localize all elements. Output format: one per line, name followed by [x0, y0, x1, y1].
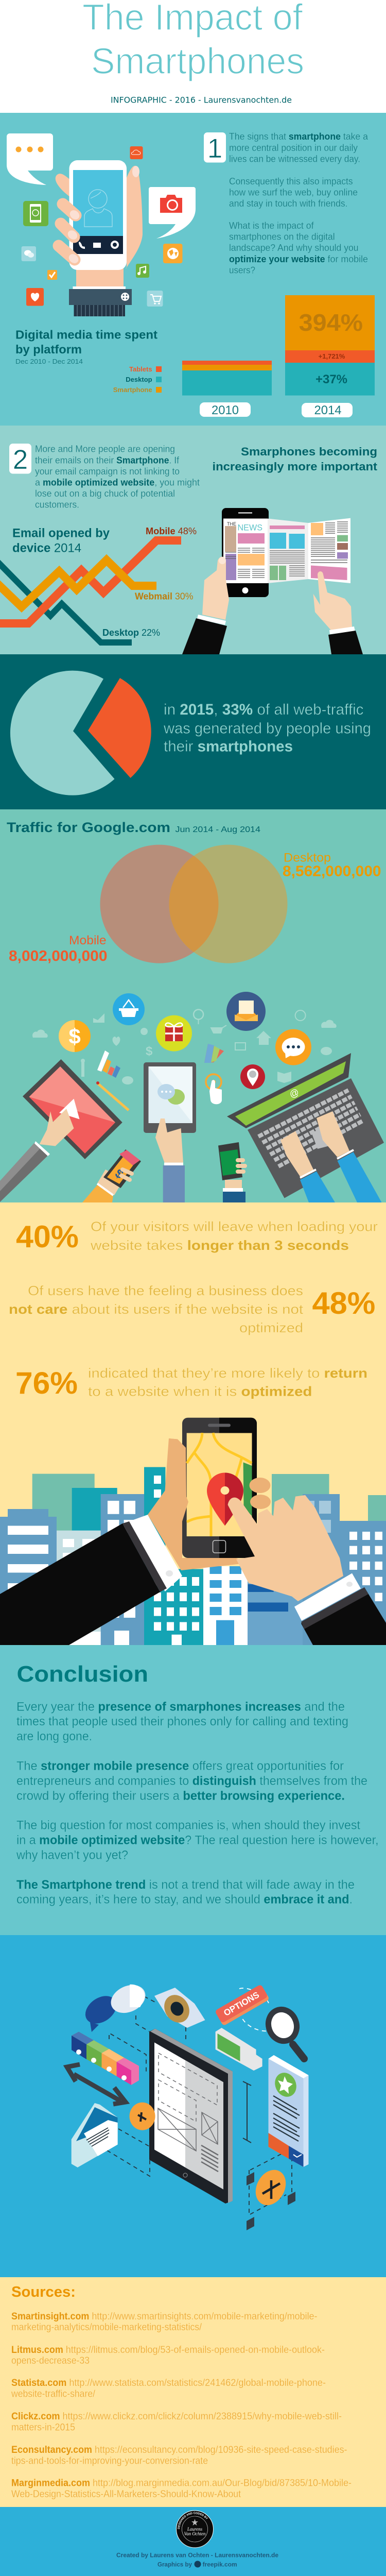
shirt cuff and sleeve: [69, 286, 132, 316]
venn label mobile: [9, 934, 107, 964]
sources list: opens-decrease-33: [11, 2355, 90, 2366]
footer badge: DESIGNED AND CODED BY: [178, 2512, 208, 2529]
phone with dollar and hand: $: [113, 1166, 126, 1182]
section 2 email text: your email campaign is not linking to: [35, 466, 180, 477]
stacked bar 2014: [285, 295, 375, 417]
section 1 intro text: users?: [229, 265, 255, 276]
stat 40%: [16, 1219, 378, 1254]
heading: email opened by device: Email opened by: [12, 526, 110, 540]
fold-out newspaper: NEWS: [238, 522, 262, 533]
chart heading: digital media time: [15, 328, 157, 365]
left thumb and fingers: [165, 1438, 271, 1525]
footer badge: Laurens: [187, 2527, 203, 2532]
dashed connector lines: [107, 1988, 292, 2215]
hand front fingers: [59, 166, 139, 265]
heading: email opened by device: [12, 526, 110, 555]
venn label mobile: Mobile: [69, 934, 107, 947]
section 1 intro text: how we surf the web, buy online: [229, 188, 358, 198]
conclusion body text: entrepreneurs and companies to distinguish themselves from the: [16, 1774, 367, 1788]
web traffic statement: in 2015, 33% of all web-traffic: [164, 701, 363, 718]
stat 48%: Of users have the feeling a business does: [28, 1283, 303, 1298]
right sleeve and cuff: [294, 1573, 386, 1645]
venn diagram: mobile vs desktop: [100, 845, 287, 963]
icon: globe: [163, 244, 182, 263]
venn label desktop: 8,562,000,000: [283, 863, 381, 880]
icon: chat bubble: [275, 1029, 311, 1065]
line chart: email opened by device: Desktop 22%: [102, 628, 160, 638]
section 1 intro text: The signs that smartphone take a: [229, 131, 369, 142]
sources list: matters-in-2015: [11, 2422, 75, 2433]
sources list: Marginmedia.com http://blog.marginmedia.com.au/Our-Blog/bid/87385/10-Mobile-: [11, 2478, 352, 2489]
illustration: city skyline: [0, 1467, 386, 1646]
stat 76%: [15, 1365, 367, 1400]
sources list: Econsultancy.com https://econsultancy.com/blog/10936-site-speed-case-studies-: [11, 2445, 347, 2455]
stat 48%: [9, 1283, 375, 1335]
icon: colour swatch: [204, 1044, 224, 1063]
phone with dollar and hand: [82, 1149, 141, 1202]
conclusion body text: in a mobile optimized website? The real question here is however,: [16, 1834, 379, 1848]
heading: smartphones more important: increasingly more important: [212, 460, 378, 473]
illustration: hand holding smartphone with app icons: [7, 133, 196, 316]
icon: music: [136, 264, 149, 278]
stacked bar 2010: 2010: [212, 403, 239, 417]
map pin: [207, 1472, 243, 1526]
conclusion body text: crowd by offering their users a better browsing experience.: [16, 1789, 345, 1803]
double arrow: [67, 2064, 126, 2104]
heading: smartphones more important: [212, 445, 378, 473]
phone: [222, 508, 269, 597]
stat 48%: not care about its users if the website is not: [9, 1301, 304, 1317]
section 1 intro text: and stay in touch with friends.: [229, 198, 348, 209]
section 2 email text: a mobile optimized website, you might: [35, 477, 200, 487]
conclusion body text: The big question for most companies is, when should they invest: [16, 1819, 360, 1832]
chart legend: [113, 365, 162, 394]
section 1 intro text: more central position in our daily: [229, 143, 358, 153]
conclusion body text: The stronger mobile presence offers great opportunities for: [16, 1759, 344, 1773]
left hand and sleeve: [182, 556, 229, 654]
section 1 intro text: Consequently this also impacts: [229, 176, 353, 187]
stat 48%: optimized: [239, 1320, 303, 1335]
section 2 email text: [35, 444, 200, 510]
option button: [215, 1984, 270, 2026]
chart heading: digital media time: by platform: [15, 343, 82, 356]
faded background icons: $: [146, 1044, 153, 1058]
stacked bar 2014: +1,721%: [319, 352, 345, 360]
stat 40%: 40%: [16, 1219, 79, 1254]
section 2 email text: customers.: [35, 500, 79, 510]
sources list: tips-and-tools-for-improving-your-conversion-rate: [11, 2456, 208, 2467]
icon: touch gesture: [206, 1074, 222, 1104]
stacked bar 2014: 2014: [314, 403, 342, 417]
icon: battery: [216, 2028, 262, 2071]
mobile card: [269, 2055, 309, 2167]
conclusion body text: are long gone.: [16, 1730, 92, 1743]
section 1 intro text: What is the impact of: [229, 221, 314, 231]
conclusion body text: coming years, it’s here to stay, and we should embrace it and.: [16, 1893, 353, 1907]
hand back fingers and arm: [56, 166, 143, 287]
illustration: hands with smartphone map: [0, 1418, 386, 1645]
icon: chat: [22, 246, 36, 261]
title: Smartphones: [91, 41, 304, 82]
smartphone with map: [182, 1418, 257, 1558]
icon: cart: [147, 291, 163, 307]
icon: dollar coin: [59, 1020, 91, 1052]
sources list: Litmus.com https://litmus.com/blog/53-of-emails-opened-on-mobile-outlook-: [11, 2345, 325, 2355]
sources list: Web-Design-Statistics-All-Marketers-Should-Know-About: [11, 2489, 241, 2500]
section 1 intro text: landscape? And why should you: [229, 243, 359, 253]
right hand: [228, 1495, 343, 1601]
section 1 intro text: smartphones on the digital: [229, 232, 335, 242]
option button: OPTIONS: [222, 1990, 261, 2018]
heading: traffic for google: Traffic for Google.com: [7, 820, 170, 835]
laptop with typing hands: @: [288, 1087, 301, 1100]
icon: green phone: [23, 201, 48, 226]
green phone with hand: [218, 1142, 245, 1202]
section 2 number badge: 2: [13, 445, 28, 475]
illustration: isometric tablet wireframe: [67, 1980, 309, 2230]
conclusion body text: [16, 1700, 379, 1907]
sources list: [11, 2311, 352, 2500]
sources list: website-traffic-share/: [11, 2389, 96, 2400]
line chart: email opened by device: [0, 526, 197, 642]
web traffic statement: [163, 701, 371, 755]
stat 40%: website takes longer than 3 seconds: [90, 1238, 349, 1253]
web traffic statement: their smartphones: [164, 738, 293, 755]
section 2 email text: their emails on their Smartphone. If: [35, 455, 180, 465]
illustration: hands reading news on smartphone: [182, 508, 363, 654]
conclusion heading: Conclusion: [16, 1662, 148, 1687]
venn label desktop: [283, 851, 381, 880]
chart legend: Tablets: [129, 365, 152, 373]
colour cubes: [72, 2032, 139, 2085]
icon: speech bubbles: [80, 1980, 150, 2032]
heading: traffic for google: [7, 820, 260, 835]
fold-out newspaper: THE: [227, 521, 236, 527]
line chart: email opened by device: Mobile 48%: [146, 526, 197, 536]
section 2 number badge: [9, 444, 31, 475]
left sleeve and cuff: [0, 1515, 182, 1645]
chart heading: digital media time: Dec 2010 - Dec 2014: [15, 358, 83, 365]
footer badge: [176, 2510, 214, 2548]
stat 76%: 76%: [15, 1366, 78, 1400]
stacked bar 2014: 394%: [299, 309, 363, 336]
stacked bar 2010: [182, 361, 272, 417]
icon: open envelope: [72, 2103, 118, 2167]
fold-out newspaper: [223, 518, 350, 583]
sources heading: Sources:: [11, 2284, 76, 2300]
faded background icons: [32, 1010, 337, 1084]
section 2 email text: More and More people are opening: [35, 444, 175, 454]
section 1 intro text: lives can be witnessed every day.: [229, 154, 360, 164]
stat 48%: 48%: [312, 1286, 375, 1320]
web traffic statement: was generated by people using: [163, 720, 371, 737]
footer credits: [116, 2552, 278, 2568]
icon: map pin: [240, 1064, 265, 1089]
height measure: [243, 2081, 251, 2143]
venn label mobile: 8,002,000,000: [9, 948, 107, 964]
icon: selected plus: [247, 2165, 295, 2230]
sources list: Statista.com http://www.statista.com/statistics/241462/global-mobile-phone-: [11, 2378, 326, 2388]
chart heading: digital media time: Digital media time spent: [15, 328, 157, 341]
centre tablet with hand: [144, 1062, 196, 1202]
chart legend: Desktop: [126, 376, 152, 383]
stacked bar 2014: +37%: [315, 372, 347, 386]
heading: email opened by device: device 2014: [12, 541, 81, 555]
red tablet with hand: [0, 1059, 122, 1202]
heading: traffic for google: Jun 2014 - Aug 2014: [175, 825, 260, 834]
conclusion body text: times that people used their phones only for calling and texting: [16, 1715, 348, 1728]
conclusion body text: Every year the presence of smarphones increases and the: [16, 1700, 345, 1714]
icon: gift: [156, 1015, 192, 1052]
stat 76%: to a website when it is optimized: [88, 1383, 312, 1399]
sources list: Clickz.com https://www.clickz.com/clickz/column/2388915/why-mobile-web-still-: [11, 2411, 342, 2422]
right hand and sleeve: [313, 571, 363, 654]
left hand behind phone: [148, 1438, 247, 1570]
sources list: Smartinsight.com http://www.smartinsights.com/mobile-marketing/mobile-: [11, 2311, 317, 2322]
icon: heart: [26, 288, 44, 306]
icon: magnifier: [264, 2006, 304, 2059]
laptop with typing hands: [227, 1053, 384, 1202]
icon: plus circle: [130, 2103, 155, 2130]
footer credits: Created by Laurens van Ochten - Laurensvanochten.de: [116, 2552, 278, 2559]
illustration: hands using devices with floating icons: [0, 992, 384, 1202]
section 1 number badge: [204, 132, 226, 164]
subtitle: INFOGRAPHIC - 2016 - Laurensvanochten.de: [111, 95, 292, 105]
footer credits: freepik.com: [203, 2561, 237, 2568]
section 1 intro text: optimize your website for mobile: [229, 254, 368, 264]
icon: bar chart and pencil: [96, 1050, 129, 1110]
title: [82, 0, 304, 82]
line chart: email opened by device: Webmail 30%: [135, 591, 194, 602]
tablet: [149, 2029, 233, 2204]
chart legend: Smartphone: [113, 386, 152, 394]
heading: smartphones more important: Smarphones becoming: [241, 445, 377, 458]
phone: [69, 160, 127, 270]
icon: cloud: [130, 146, 143, 159]
icon: eye: [154, 1988, 205, 2028]
sources list: marketing-analytics/mobile-marketing-statistics/: [11, 2322, 202, 2333]
pie chart: 33% of web traffic: [10, 671, 151, 795]
icon: envelope: [226, 992, 266, 1031]
icon: camera speech bubble: [149, 187, 196, 239]
stat 76%: indicated that they’re more likely to return: [88, 1365, 367, 1381]
section 1 number badge: 1: [207, 133, 222, 164]
icon: dollar coin: $: [68, 1024, 81, 1048]
footer badge: Van Ochten: [184, 2531, 206, 2536]
conclusion body text: why haven’t you yet?: [16, 1848, 128, 1862]
section 2 email text: lose out on a big chuck of potential: [35, 488, 175, 499]
section 1 intro text: [229, 131, 369, 276]
footer credits: Graphics by: [157, 2561, 192, 2568]
icon: basket: [113, 993, 145, 1025]
venn label desktop: Desktop: [284, 851, 331, 865]
speech bubble with dots: [7, 133, 53, 185]
stat 40%: Of your visitors will leave when loading your: [91, 1219, 378, 1234]
conclusion body text: The Smartphone trend is not a trend that will fade away in the: [16, 1878, 355, 1892]
icon: check: [47, 270, 57, 280]
